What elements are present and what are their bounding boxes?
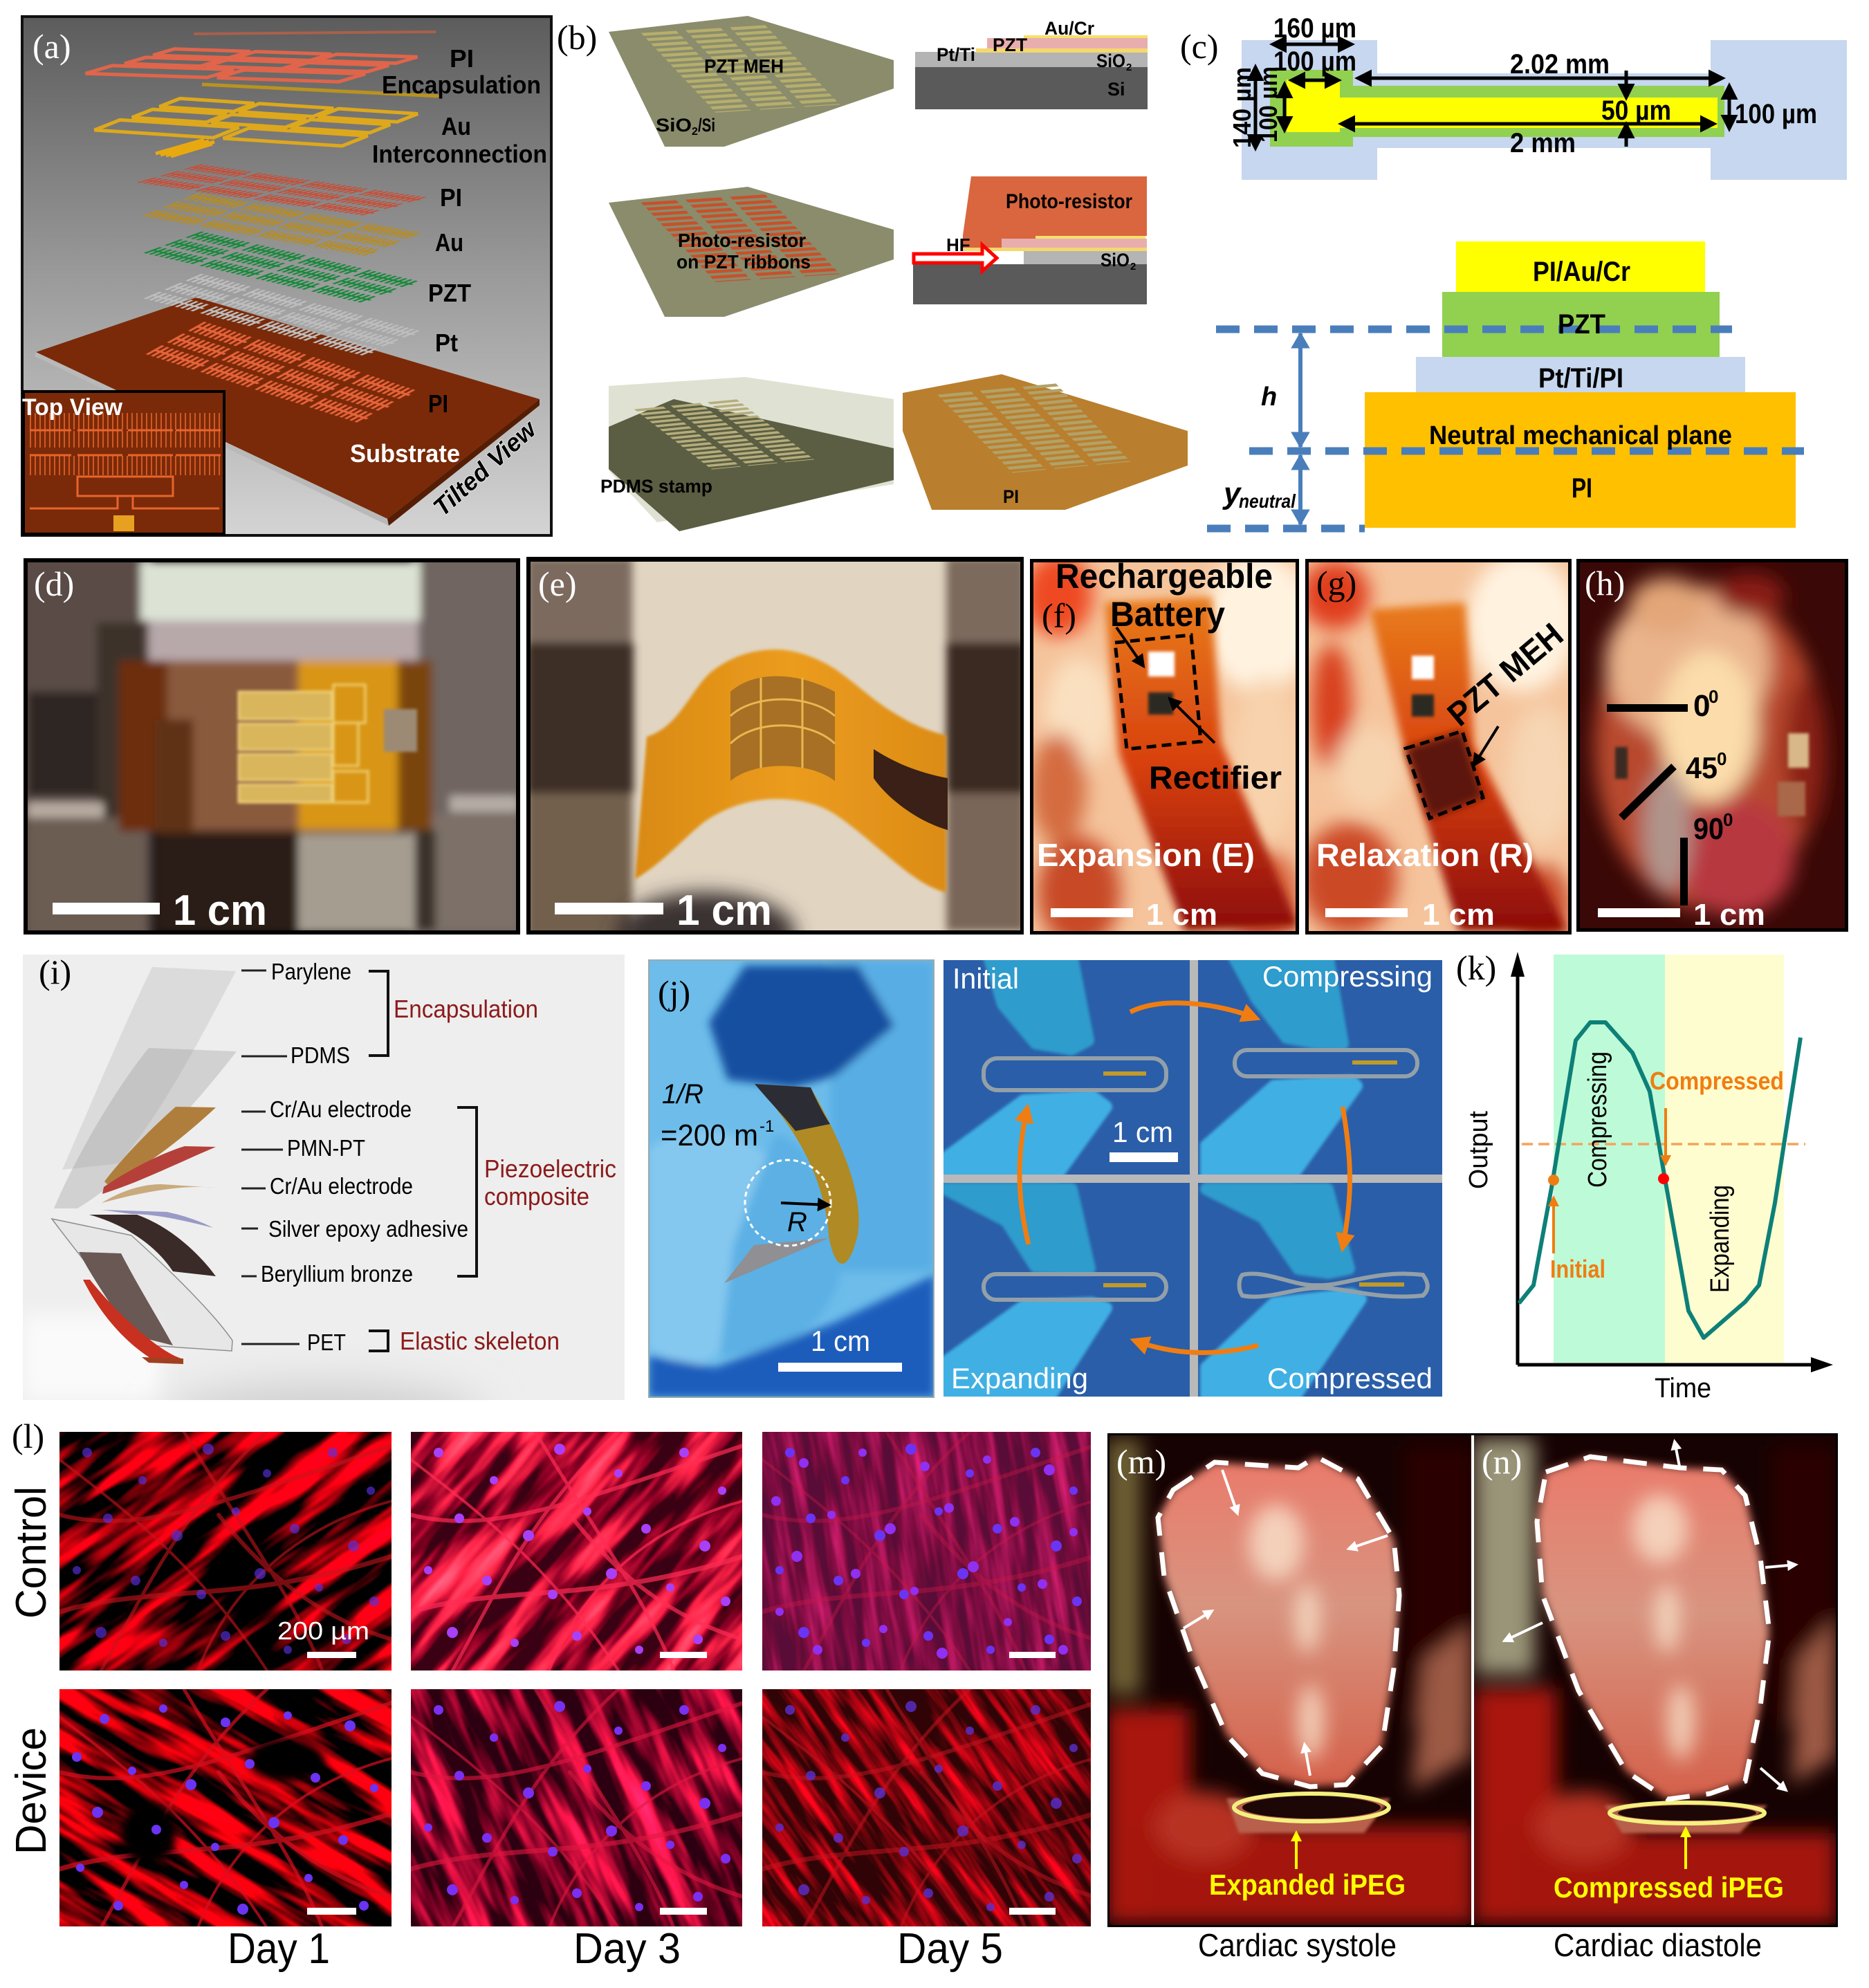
panel a labels: Au: [441, 112, 471, 140]
group names: Piezoelectric: [484, 1154, 616, 1183]
stack labels: PI: [1572, 473, 1592, 504]
device ring m: [1242, 1796, 1381, 1819]
step 1 cross section: 2: [1126, 62, 1132, 73]
step 2 cross section: HF: [946, 234, 970, 255]
sequence labels: Compressed: [1267, 1362, 1433, 1395]
panel a labels: Substrate: [350, 439, 460, 468]
dashed outline n: [1537, 1457, 1769, 1799]
ring arrow m: [1295, 1833, 1298, 1869]
dividers: [943, 960, 1442, 1397]
group names: Elastic skeleton: [400, 1327, 560, 1355]
arrow: HF etch: [914, 245, 997, 271]
step 1 cross section: PZT: [993, 35, 1027, 55]
chips: [1412, 656, 1434, 717]
layer names: Cr/Au electrode: [270, 1173, 413, 1199]
label c: (c): [1180, 27, 1219, 66]
photo labels: Compressed iPEG: [1554, 1871, 1784, 1904]
step 2 slab: on PZT ribbons: [676, 251, 811, 273]
neutral plane dashes and arrows: h: [1261, 383, 1277, 412]
ring arrow n: [1684, 1829, 1687, 1869]
chart labels: Compressing: [1583, 1051, 1612, 1188]
top view geometry: 2.02 mm: [1510, 49, 1610, 80]
bottom shadow: [607, 876, 810, 930]
panel d: flat device photo: [14, 553, 529, 941]
chips: [1148, 652, 1175, 715]
label d: (d): [34, 564, 74, 603]
chart labels: [1456, 948, 1784, 1403]
layer names: Silver epoxy adhesive: [268, 1216, 468, 1242]
day labels: Day 3: [573, 1925, 681, 1973]
group names: composite: [484, 1182, 589, 1211]
panel f labels: Battery: [1110, 595, 1225, 634]
step 2 cross section: SiO: [1101, 250, 1130, 270]
panel h labels and angle bars: 90: [1693, 812, 1724, 846]
threshold line: [1522, 1143, 1805, 1145]
panel h labels and angle bars: [1585, 564, 1765, 932]
top view geometry: 100 µm: [1273, 46, 1356, 77]
heart m: [1158, 1457, 1399, 1787]
step 3 PDMS stamp: PDMS stamp: [600, 476, 712, 497]
labels j: (j): [658, 973, 690, 1012]
row labels: Control: [8, 1487, 55, 1619]
device gold grid: [239, 685, 417, 802]
lead lines: [241, 970, 300, 1344]
step 1 slab: 2: [692, 126, 698, 138]
panel f labels: 1 cm: [1146, 898, 1217, 932]
panel b: fabrication steps: [557, 16, 1188, 531]
state dots: [1548, 1173, 1669, 1186]
panel g labels: [1316, 564, 1570, 932]
labels j: R: [787, 1207, 807, 1237]
photo n: cardiac diastole: [1474, 1435, 1836, 1925]
dashed circle R: [745, 1160, 831, 1246]
gold interconnection layer: [94, 98, 423, 156]
step 1 cross section: [915, 18, 1148, 109]
chart labels: Expanding: [1706, 1185, 1735, 1293]
motion arrows n: [1504, 1442, 1796, 1790]
layer names: PMN-PT: [287, 1135, 365, 1161]
layer names: Beryllium bronze: [261, 1261, 413, 1287]
step 2 cross section: [913, 176, 1147, 304]
callout arrows: [1116, 627, 1215, 743]
sequence labels: 1 cm: [1112, 1116, 1173, 1148]
scale bars and 200 um label: [277, 1617, 1056, 1915]
labels j: -1: [759, 1117, 774, 1136]
label i: (i): [39, 952, 71, 991]
stack labels: Neutral mechanical plane: [1429, 421, 1732, 450]
micrograph: device day 1: [59, 1689, 392, 1928]
neutral plane dashes and arrows: y: [1222, 477, 1242, 510]
row labels: [8, 1487, 55, 1854]
axis arrowheads: [1511, 952, 1833, 1372]
labels j: [658, 973, 902, 1372]
panel a labels: PI: [428, 389, 448, 418]
device strip: [1105, 597, 1298, 931]
panel h labels and angle bars: 0: [1709, 686, 1718, 707]
layer names: Parylene: [271, 959, 351, 984]
step 1 slab: [609, 16, 894, 147]
chart labels: Output: [1464, 1111, 1493, 1189]
Au comb layer: [150, 196, 415, 253]
text: top view: Top View: [22, 394, 123, 421]
step 1 slab: SiO: [656, 115, 692, 136]
step 1 slab: PZT MEH: [704, 55, 784, 77]
panel i: piezoelectric composite layers: [23, 952, 625, 1453]
scale bar d: [53, 887, 267, 935]
micrograph: device day 3: [411, 1689, 743, 1928]
panel h: heart with angles: [1576, 559, 1848, 932]
day labels: [228, 1925, 1003, 1973]
top view geometry: 100 µm: [1254, 66, 1282, 142]
photo labels: (m): [1116, 1442, 1166, 1481]
stack labels: Pt/Ti/PI: [1538, 363, 1623, 394]
panel c: dimensions and stack: [1180, 13, 1847, 528]
step 2 slab: Photo-resistor: [678, 230, 806, 251]
step 3 PI transfer: PI: [1003, 486, 1019, 507]
panel a labels: Pt: [435, 329, 458, 357]
device ring n: [1618, 1805, 1756, 1821]
layer names: PET: [307, 1329, 346, 1355]
top view geometry: 50 µm: [1601, 95, 1671, 126]
step 1 cross section: SiO: [1096, 50, 1125, 71]
step 1 slab: /Si: [698, 115, 715, 136]
tissue below ring: [1226, 1798, 1390, 1833]
photo labels: [1116, 1442, 1784, 1904]
device strip: [1370, 602, 1567, 931]
label b: (b): [557, 18, 597, 57]
devices: [984, 1050, 1428, 1300]
micrograph: control day 1: [59, 1432, 392, 1671]
sequence labels: Expanding: [951, 1362, 1088, 1395]
side patch: [1615, 733, 1809, 816]
panel g labels: 1 cm: [1422, 898, 1495, 932]
device grid: [730, 677, 948, 830]
neutral plane dashes and arrows: [1207, 329, 1804, 528]
chart labels: Time: [1655, 1373, 1711, 1403]
cycle arrows: [1020, 1003, 1350, 1352]
top view geometry: 100 µm: [1735, 99, 1817, 129]
substrate slab: [35, 297, 540, 526]
chart labels: Initial: [1550, 1255, 1605, 1283]
step 3 PI transfer: [903, 374, 1188, 510]
frame j: [649, 960, 934, 1397]
layer names: PDMS: [291, 1042, 350, 1068]
PI comb layer: [146, 167, 420, 213]
layer names: Cr/Au electrode: [270, 1096, 412, 1122]
panel h labels and angle bars: 0: [1693, 689, 1710, 723]
panel h labels and angle bars: 1 cm: [1693, 898, 1765, 932]
dashed outline: [1115, 635, 1201, 749]
axes: [1518, 961, 1822, 1365]
sequence labels: Compressing: [1262, 960, 1433, 993]
day labels: Day 5: [897, 1925, 1003, 1973]
panel a labels: [33, 27, 547, 522]
panel f labels: Rechargeable: [1056, 557, 1273, 596]
group names: Encapsulation: [394, 995, 538, 1023]
panel k: output chart: [1456, 948, 1833, 1403]
step 1 cross section: Au/Cr: [1044, 18, 1094, 39]
day labels: Day 1: [228, 1925, 330, 1973]
sequence labels: Initial: [952, 962, 1019, 995]
panel a: exploded layers: [22, 17, 551, 535]
step 1 cross section: Pt/Ti: [937, 44, 975, 65]
top view geometry: 160 µm: [1273, 13, 1356, 44]
panel g labels: (g): [1316, 564, 1356, 602]
step 2 cross section: 2: [1130, 261, 1136, 273]
panel f labels: Expansion (E): [1037, 837, 1255, 873]
tissue below ring: [1605, 1805, 1767, 1833]
panel g: relaxation on heart: [1300, 553, 1577, 948]
panel h labels and angle bars: 0: [1723, 809, 1733, 830]
panel j: bent device on fingers: [649, 960, 934, 1397]
panel e: buckled device photo: [526, 557, 1024, 935]
chart labels: Compressed: [1650, 1067, 1784, 1095]
brackets: [369, 971, 477, 1351]
phase bands: [1554, 955, 1784, 1363]
panel a labels: PI: [450, 44, 474, 73]
stack labels: PI/Au/Cr: [1533, 257, 1630, 287]
panel h labels and angle bars: (h): [1585, 564, 1625, 602]
stack labels: PZT: [1558, 309, 1605, 340]
scale bar d: 1 cm: [173, 887, 267, 935]
panel f labels: (f): [1042, 596, 1076, 635]
step 2 cross section: Photo-resistor: [1006, 190, 1132, 213]
panel f labels: [1037, 557, 1282, 932]
panel a labels: Au: [435, 228, 463, 257]
panel h labels and angle bars: 0: [1717, 748, 1727, 769]
panel a labels: (a): [33, 27, 71, 66]
photo labels: Expanded iPEG: [1209, 1868, 1406, 1901]
step 2 slab: [609, 187, 894, 317]
micrograph: control day 5: [762, 1432, 1094, 1671]
panel a labels: PI: [440, 183, 462, 212]
label l: (l): [12, 1417, 44, 1455]
PZT comb layer: [151, 234, 412, 300]
panel a labels: PZT: [428, 279, 471, 307]
photo m: cardiac systole: [1107, 1435, 1473, 1925]
sequence labels: [951, 960, 1433, 1395]
panels m and n: heart photos: [1107, 1433, 1838, 1963]
label e: (e): [538, 564, 577, 603]
panel f: expansion on heart: [1030, 559, 1299, 935]
divider: [1471, 1435, 1474, 1925]
captions: [1198, 1927, 1762, 1963]
panel g labels: PZT MEH: [1441, 616, 1570, 733]
panel j sequence: four-state finger photos: [943, 955, 1442, 1401]
PI comb on substrate: [154, 326, 409, 418]
group names: [394, 995, 616, 1355]
panel g labels: Relaxation (R): [1316, 837, 1534, 873]
dashed outline m: [1158, 1457, 1399, 1787]
panel a labels: Encapsulation: [382, 71, 541, 99]
scale bar e: 1 cm: [676, 887, 772, 935]
encapsulation wire layer: [86, 32, 440, 96]
panel h labels and angle bars: 45: [1686, 751, 1718, 785]
captions: Cardiac systole: [1198, 1927, 1397, 1963]
scale bars and 200 um label: 200 µm: [277, 1617, 369, 1645]
neutral plane dashes and arrows: neutral: [1239, 490, 1296, 512]
top view geometry: 2 mm: [1510, 128, 1576, 158]
top view geometry: [1228, 13, 1847, 180]
output curve: [1519, 1022, 1801, 1338]
row labels: Device: [8, 1727, 55, 1854]
state arrows: [1554, 1108, 1666, 1253]
panel a labels: Tilted View: [427, 414, 542, 522]
arrow: [1474, 726, 1498, 765]
top view geometry: 140 µm: [1228, 67, 1256, 148]
chart labels: (k): [1456, 948, 1496, 987]
labels j: 1 cm: [811, 1325, 870, 1357]
panel l: cell micrographs: [8, 1417, 1094, 1973]
micrograph: control day 3: [411, 1432, 743, 1671]
panel f labels: Rectifier: [1149, 760, 1282, 795]
layer stack: [1365, 241, 1796, 528]
labels j: =200 m: [661, 1119, 758, 1152]
labels j: 1/R: [662, 1079, 703, 1110]
step 3 PDMS stamp: [600, 377, 894, 531]
step 1 cross section: Si: [1107, 79, 1125, 100]
bent strip: [755, 1084, 859, 1264]
scale bar e: [555, 887, 772, 935]
inset: top view: [22, 392, 224, 534]
motion arrows m: [1184, 1470, 1388, 1776]
micrograph: device day 5: [762, 1689, 1094, 1928]
captions: Cardiac diastole: [1554, 1927, 1762, 1963]
PZT MEH region: [1406, 731, 1483, 818]
Pt comb layer: [151, 277, 414, 353]
bent orange film: [635, 650, 946, 892]
panel a labels: Interconnection: [372, 140, 547, 168]
photo labels: (n): [1482, 1442, 1522, 1481]
stack labels: [1429, 257, 1732, 504]
layer names: [261, 959, 468, 1355]
illustration: exploded sheets: [23, 967, 484, 1453]
heart n: [1537, 1457, 1769, 1799]
